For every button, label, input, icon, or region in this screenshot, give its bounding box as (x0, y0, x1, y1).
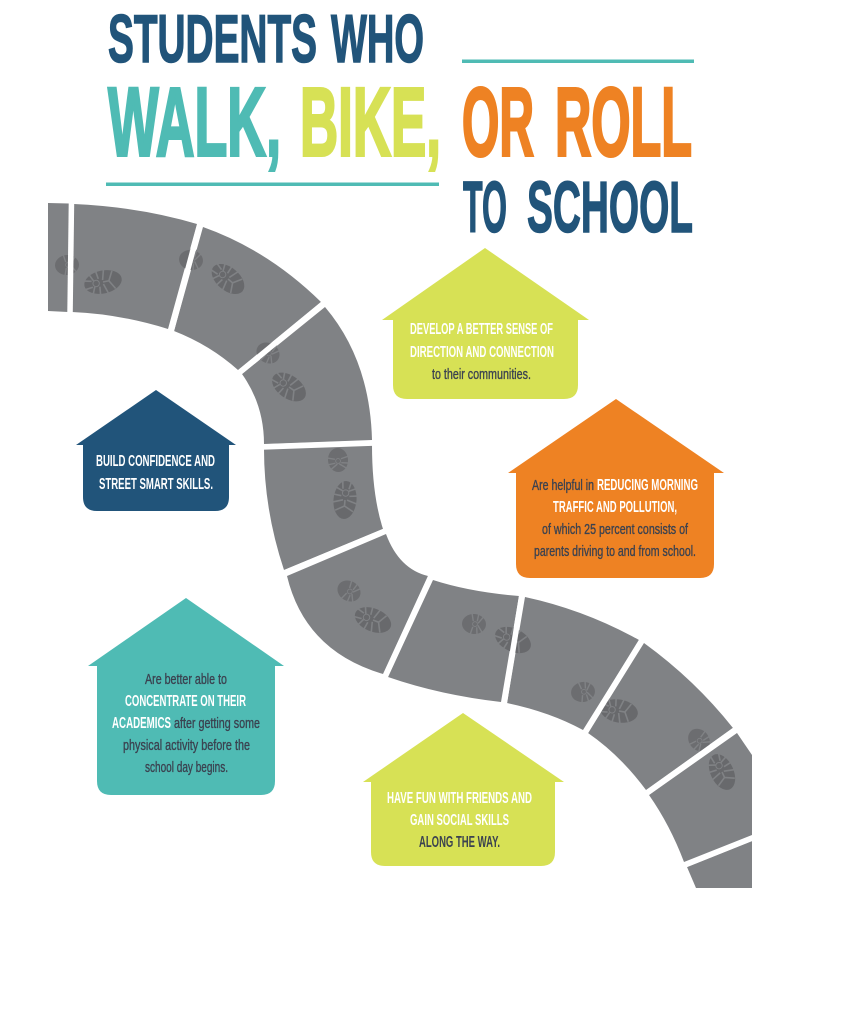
callout house: friends and social skills: ALONG THE WAY. (419, 834, 500, 851)
callout house: confidence (76, 390, 236, 511)
callout house: academics (88, 598, 284, 795)
callout house: traffic and pollution: of which 25 percent consists of (542, 521, 689, 538)
title word: school: SCHOOL (527, 168, 693, 248)
road segments (48, 203, 752, 888)
title word: walk: WALK, (108, 68, 281, 176)
callout house: traffic and pollution: TRAFFIC AND POLLUTION, (553, 499, 677, 516)
callout house: direction and connection: DIRECTION AND CONNECTION (410, 344, 554, 361)
callout house: direction and connection: to their communities. (432, 366, 531, 383)
callout house: academics: Are better able to (145, 671, 227, 688)
title word: students: STUDENTS (108, 1, 317, 77)
callout house: confidence: BUILD CONFIDENCE AND (96, 453, 215, 470)
callout house: friends and social skills (363, 713, 564, 866)
winding road with footprints (48, 200, 755, 888)
callout house: academics: physical activity before the (123, 737, 250, 754)
callout house: academics: school day begins. (145, 759, 228, 776)
callout house: academics: after getting some (174, 715, 260, 732)
callout house: friends and social skills: GAIN SOCIAL SKILLS (410, 812, 509, 829)
callout house: traffic and pollution: Are helpful in (532, 477, 594, 494)
callout house: direction and connection: DEVELOP A BETTER SENSE OF (410, 321, 553, 338)
title: TO (463, 168, 507, 248)
road gaps over footprints (70, 200, 755, 865)
title (108, 1, 693, 248)
title word: bike: BIKE, (300, 68, 441, 176)
callout house: friends and social skills: HAVE FUN WITH FRIENDS AND (387, 790, 532, 807)
title: OR (462, 68, 534, 176)
title word: who: WHO (331, 1, 424, 77)
callout house: traffic and pollution (508, 399, 724, 578)
title word: roll: ROLL (555, 68, 692, 176)
callout house: traffic and pollution: parents driving to and from school. (534, 543, 696, 560)
callout house: direction and connection (382, 248, 589, 399)
callout house: traffic and pollution: REDUCING MORNING (597, 477, 698, 494)
callout house: academics: CONCENTRATE ON THEIR (125, 693, 246, 710)
callout house: academics: ACADEMICS (112, 715, 171, 732)
callout house: confidence: STREET SMART SKILLS. (99, 476, 213, 493)
footprints (54, 247, 741, 794)
